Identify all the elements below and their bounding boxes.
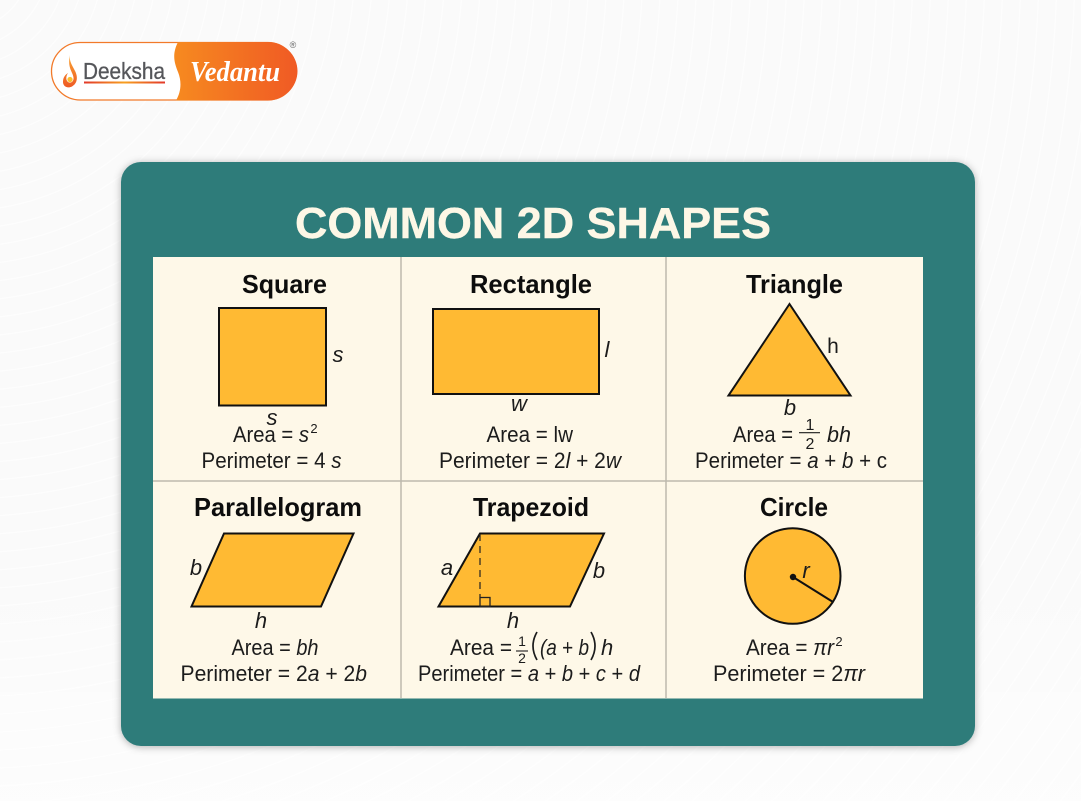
icon: square shape: [219, 308, 326, 406]
logo flame icon: [63, 55, 77, 87]
cell: Parallelogram: [180, 492, 367, 686]
formula: triangle perimeter: Perimeter = a + b + c: [695, 448, 887, 473]
cell: Trapezoid: [418, 492, 641, 686]
icon: rectangle shape: [433, 309, 599, 394]
cell: Circle: [713, 492, 867, 686]
logo: Deeksha Vedantu: [52, 40, 298, 100]
heading: Triangle: Triangle: [746, 269, 843, 299]
formula: parallelogram area: Area = bh: [232, 635, 318, 660]
heading: Rectangle: Rectangle: [470, 269, 592, 299]
title: COMMON 2D SHAPES: [295, 199, 771, 248]
formula: trapezoid area: [450, 632, 613, 666]
formula: triangle area: 1: [806, 417, 815, 434]
label: width w: w: [511, 391, 529, 416]
icon: circle shape with radius: [745, 528, 840, 624]
panel: teal card: [121, 162, 975, 746]
logo Vedantu wordmark: Vedantu: [190, 56, 280, 88]
formula: trapezoid perimeter: Perimeter = a + b + c + d: [418, 661, 641, 686]
formula: trapezoid area: (a + b: [540, 635, 589, 660]
label: side s right: s: [332, 342, 344, 367]
formula: trapezoid area: 2: [518, 650, 526, 666]
label: height h: h: [507, 608, 519, 633]
formula: trapezoid area: Area =: [450, 635, 512, 660]
exponent: circle: 2: [835, 634, 843, 649]
cell: Rectangle: [433, 269, 623, 473]
formula: trapezoid area: 1: [518, 633, 526, 649]
formula: trapezoid area: h: [601, 635, 613, 660]
logo orange section: [174, 42, 298, 100]
icon: trapezoid shape: [438, 534, 604, 606]
icon: parallelogram shape: [192, 534, 354, 606]
logo underline: [84, 82, 165, 84]
formula: rectangle perimeter: Perimeter = 2l + 2w: [439, 448, 623, 473]
formula: rectangle area: Area = lw: [486, 422, 573, 447]
label: side a: a: [441, 555, 453, 580]
label: side h: h: [827, 335, 839, 358]
exponent: square: 2: [310, 421, 318, 436]
label: side b: b: [190, 555, 202, 580]
heading: Trapezoid: Trapezoid: [473, 492, 589, 522]
label: side s bottom: s: [266, 405, 278, 430]
formula: circle area: Area = πr: [746, 635, 836, 660]
logo Deeksha wordmark: Deeksha: [83, 58, 165, 84]
heading: Parallelogram: Parallelogram: [194, 492, 362, 522]
heading: Square: Square: [242, 269, 327, 299]
formula: circle perimeter: Perimeter = 2πr: [713, 661, 867, 686]
formula: triangle area: Area =: [733, 422, 793, 447]
icon: triangle shape: [728, 304, 850, 396]
formula: parallelogram perimeter: Perimeter = 2a + 2b: [180, 661, 367, 686]
formula: triangle area: [733, 417, 851, 453]
formula: square area: Area = s: [233, 422, 309, 447]
formula: triangle area: 2: [806, 436, 815, 453]
cell: Square: [202, 269, 344, 473]
logo registered mark: ®: [290, 40, 297, 50]
heading: Circle: Circle: [760, 492, 828, 522]
grid panel: cream table: [153, 257, 923, 698]
label: base b: b: [784, 395, 796, 420]
label: base h: h: [255, 608, 267, 633]
label: length l: l: [605, 337, 611, 362]
formula: triangle area: bh: [827, 422, 851, 447]
label: side b: b: [593, 558, 605, 583]
formula: square perimeter: Perimeter = 4 s: [202, 448, 341, 473]
label: radius r: r: [802, 558, 811, 583]
cell: Triangle: [695, 269, 887, 473]
